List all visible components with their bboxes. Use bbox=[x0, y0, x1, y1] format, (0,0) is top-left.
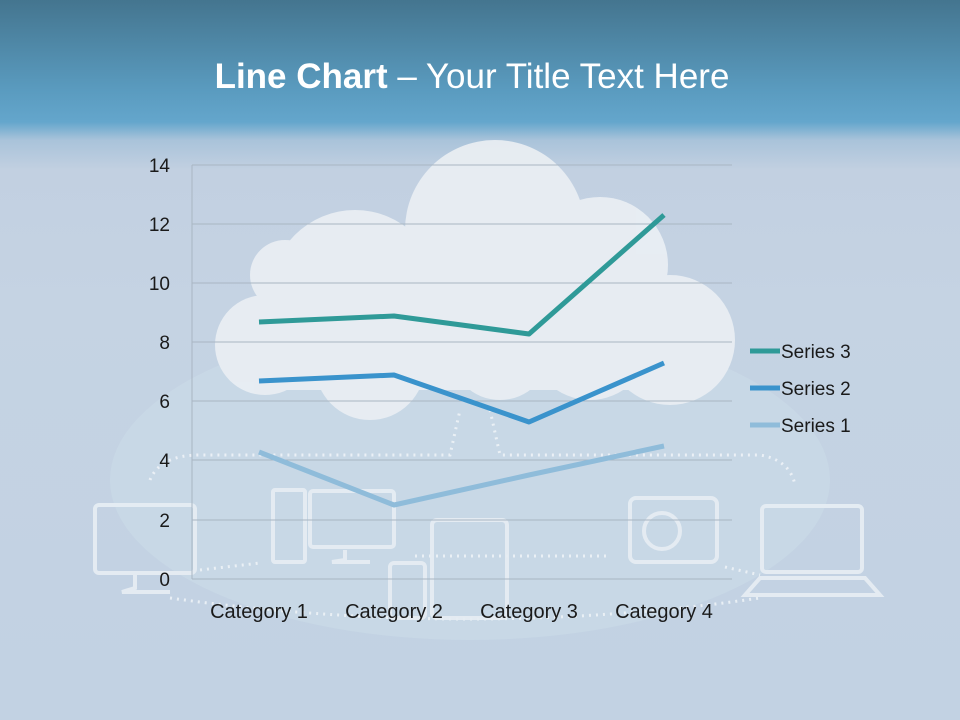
x axis labels: Category 4 bbox=[615, 601, 713, 623]
y axis labels: 10 bbox=[149, 274, 170, 295]
x axis labels: Category 3 bbox=[480, 601, 578, 623]
title: Line Chart – Your Title Text Here bbox=[215, 57, 729, 96]
y axis labels: 0 bbox=[159, 570, 170, 591]
legend: Series 3 bbox=[781, 342, 851, 363]
legend: Series 2 bbox=[781, 379, 851, 400]
legend bbox=[750, 342, 851, 437]
background glow bbox=[110, 320, 830, 640]
icons: devices bbox=[95, 490, 880, 618]
y axis labels: 12 bbox=[149, 215, 170, 236]
y axis labels bbox=[149, 156, 170, 591]
legend: Series 1 bbox=[781, 416, 851, 437]
y axis labels: 6 bbox=[159, 392, 170, 413]
x axis labels: Category 2 bbox=[345, 601, 443, 623]
decorative dotted network bbox=[150, 410, 795, 619]
y axis labels: 4 bbox=[159, 451, 170, 472]
icon: cloud bbox=[215, 140, 735, 420]
line chart bbox=[149, 156, 732, 623]
series 2 bbox=[259, 363, 664, 422]
y axis labels: 14 bbox=[149, 156, 170, 177]
x axis labels: Category 1 bbox=[210, 601, 308, 623]
series 1 bbox=[259, 446, 664, 505]
y axis labels: 8 bbox=[159, 333, 170, 354]
y axis labels: 2 bbox=[159, 511, 170, 532]
x axis labels bbox=[210, 601, 713, 623]
series 3 bbox=[259, 215, 664, 334]
